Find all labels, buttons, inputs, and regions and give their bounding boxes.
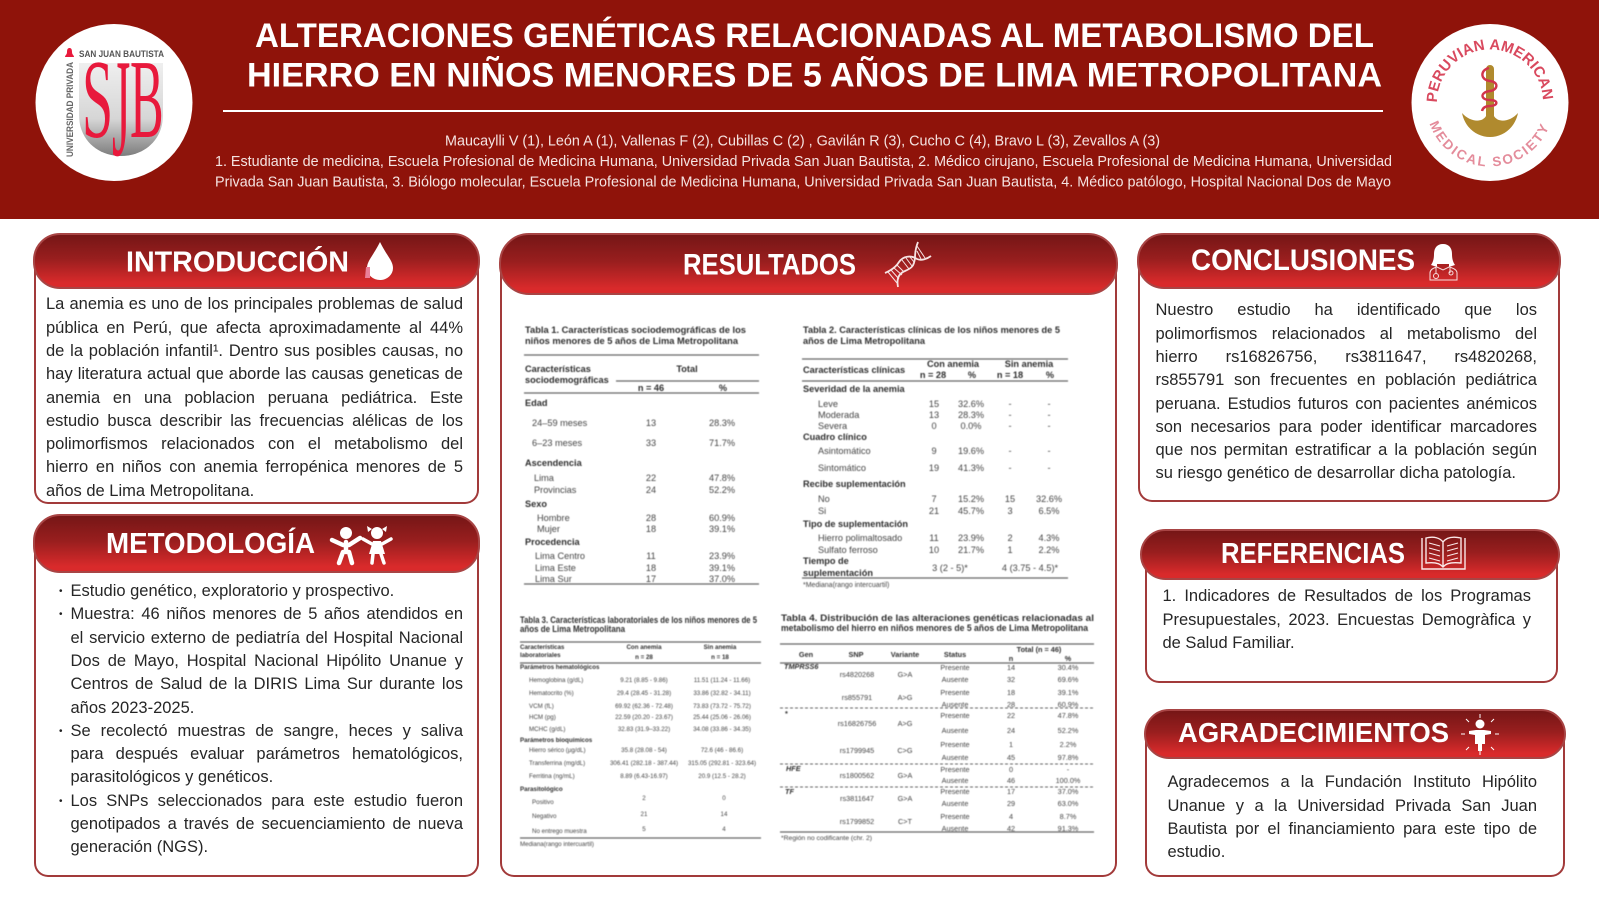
table 4: alteraciones genéticas: *: [785, 709, 788, 718]
heading: agradecimientos: AGRADECIMIENTOS: [1178, 717, 1449, 748]
heading: referencias: REFERENCIAS: [1221, 538, 1405, 570]
table 4: alteraciones genéticas: 0: [1009, 765, 1013, 774]
table 2: clínicas: 13: [929, 410, 939, 420]
table 2: clínicas: 15: [1005, 494, 1015, 504]
table 3: laboratoriales: 11.51 (11.24 - 11.66): [694, 677, 750, 684]
logo: Universidad Privada San Juan Bautista: B: [130, 38, 164, 162]
table 1: sociodemográficas: 39.1%: [709, 524, 735, 534]
table 2: clínicas: 32.6%: [958, 399, 984, 409]
table 1: sociodemográficas: 52.2%: [709, 485, 735, 495]
table 1: sociodemográficas: 28.3%: [709, 418, 735, 428]
table 2: clínicas: Tabla 2. Características clínicas de los niños menores de 5: [803, 325, 1061, 336]
text: metodología: genotipados a través de secuenciamiento de nueva: [70, 815, 463, 833]
table 3: laboratoriales: 14: [721, 811, 728, 818]
table 4: alteraciones genéticas: 24: [1007, 726, 1015, 735]
table 4: alteraciones genéticas: 30.4%: [1058, 663, 1079, 672]
table 4: alteraciones genéticas: 60.9%: [1058, 700, 1079, 709]
table 1: sociodemográficas: Procedencia: [525, 537, 581, 547]
text: agradecimientos: [1168, 773, 1537, 861]
table 1: sociodemográficas: niños menores de 5 años de Lima Metropolitana: [525, 336, 739, 347]
table 1: sociodemográficas: Características: [525, 364, 591, 374]
logo: Universidad Privada San Juan Bautista: S: [82, 38, 113, 162]
table 3: laboratoriales: años de Lima Metropolitana: [520, 624, 626, 635]
text: metodología: para después evaluar parámetros hematológicos,: [70, 745, 463, 763]
table 1: sociodemográficas: Sexo: [525, 499, 547, 509]
table 3: laboratoriales: 0: [722, 795, 726, 802]
table 4: alteraciones genéticas: Ausente: [942, 799, 968, 808]
table 4: alteraciones genéticas: rs1799852: [840, 817, 874, 826]
table 2: clínicas: Tipo de suplementación: [803, 519, 908, 529]
table 2: clínicas: 15: [929, 399, 939, 409]
table 4: alteraciones genéticas: Ausente: [942, 753, 968, 762]
logo: Peruvian American Medical Society: MEDICAL SOCIETY: [1430, 120, 1548, 166]
text: referencias: de Salud Familiar.: [1162, 634, 1295, 652]
table 2: clínicas: 10: [929, 545, 939, 555]
table 4: alteraciones genéticas: rs3811647: [840, 794, 874, 803]
table 1: sociodemográficas: 13: [646, 418, 656, 428]
table 2: clínicas: 0.0%: [961, 421, 981, 431]
table 2: clínicas: Sintomático: [818, 463, 866, 473]
text: introducción: polimorfismos relacionados con el metabolismo del: [46, 435, 463, 453]
table 4: alteraciones genéticas: Ausente: [942, 726, 968, 735]
table 2: clínicas: -: [1047, 410, 1051, 420]
table 4: alteraciones genéticas: 17: [1007, 787, 1015, 796]
table 1: sociodemográficas: 18: [646, 524, 656, 534]
table 3: laboratoriales: 2: [642, 795, 646, 802]
table 2: clínicas: [802, 325, 1068, 589]
table 4: alteraciones genéticas: Presente: [940, 740, 970, 749]
panel: introducción: [33, 233, 480, 504]
table 2: clínicas: n = 28: [920, 370, 946, 380]
table 4: alteraciones genéticas: Ausente: [942, 700, 968, 709]
table 3: laboratoriales: 306.41 (282.18 - 387.44): [610, 760, 678, 767]
table 1: sociodemográficas: %: [719, 383, 727, 393]
title: ALTERACIONES GENÉTICAS RELACIONADAS AL METABOLISMO DEL: [255, 15, 1374, 55]
table 3: laboratoriales: Ferritina (ng/mL): [529, 773, 575, 780]
table 4: alteraciones genéticas: 39.1%: [1058, 688, 1079, 697]
table 3: laboratoriales: 34.08 (33.86 - 34.35): [693, 726, 751, 733]
table 3: laboratoriales: 73.83 (73.72 - 75.72): [693, 703, 751, 710]
table 4: alteraciones genéticas: 52.2%: [1058, 726, 1079, 735]
heading: introducción: INTRODUCCIÓN: [126, 244, 349, 278]
table 2: clínicas: 4 (3.75 - 4.5)*: [1002, 563, 1059, 573]
text: metodología: generación (NGS).: [70, 838, 208, 856]
panel: resultados: [499, 233, 1118, 877]
text: conclusiones: peruana. Estudios futuros con pacientes anémicos: [1156, 395, 1537, 413]
table 2: clínicas: Sin anemia: [1005, 359, 1054, 369]
table 3: laboratoriales: Con anemia: [626, 644, 662, 651]
logo: Peruvian American Medical Society: PERUVIAN AMERICAN: [1426, 39, 1554, 102]
table 1: sociodemográficas: n = 46: [638, 383, 664, 393]
panel: agradecimientos: [1144, 709, 1566, 877]
table 2: clínicas: 45.7%: [958, 506, 984, 516]
table 3: laboratoriales: VCM (fL): [529, 703, 554, 710]
table 4: alteraciones genéticas: A>G: [898, 693, 913, 702]
table 2: clínicas: 1: [1007, 545, 1013, 555]
panel: metodología: •: [59, 726, 63, 737]
table 2: clínicas: Recibe suplementación: [803, 479, 906, 489]
table 1: sociodemográficas: 37.0%: [709, 574, 735, 584]
table 3: laboratoriales: Características: [520, 644, 565, 651]
table 2: clínicas: Cuadro clínico: [803, 432, 867, 442]
table 4: alteraciones genéticas: 42: [1007, 824, 1015, 833]
panel: referencias: [1140, 529, 1560, 683]
table 3: laboratoriales: Positivo: [532, 799, 554, 806]
table 2: clínicas: Severidad de la anemia: [803, 384, 906, 394]
table 4: alteraciones genéticas: 8.7%: [1060, 812, 1077, 821]
table 3: laboratoriales: HCM (pg): [529, 714, 556, 721]
text: agradecimientos: Agradecemos a la Fundación Instituto Hipólito: [1168, 773, 1537, 791]
table 4: alteraciones genéticas: 2.2%: [1060, 740, 1077, 749]
table 3: laboratoriales: n = 18: [711, 654, 729, 661]
table 1: sociodemográficas: Lima: [534, 473, 555, 483]
table 3: laboratoriales: Hematocrito (%): [529, 690, 574, 697]
table 4: alteraciones genéticas: [780, 613, 1094, 842]
heading: resultados: RESULTADOS: [683, 248, 856, 282]
table 3: laboratoriales: Hemoglobina (g/dL): [529, 677, 583, 684]
header band: [0, 0, 1599, 219]
logo: Peruvian American Medical Society: [1412, 24, 1568, 181]
table 4: alteraciones genéticas: A>G: [898, 719, 913, 728]
table 4: alteraciones genéticas: G>A: [898, 794, 913, 803]
table 4: alteraciones genéticas: Presente: [940, 765, 970, 774]
table 2: clínicas: años de Lima Metropolitana: [803, 336, 926, 347]
table 1: sociodemográficas: 24: [646, 485, 656, 495]
table 4: alteraciones genéticas: n: [1009, 654, 1013, 663]
heading: metodología: METODOLOGÍA: [106, 526, 315, 560]
table 1: sociodemográficas: 22: [646, 473, 656, 483]
text: conclusiones: su riesgo genético de desarrollar dicha patología.: [1156, 464, 1516, 482]
table 2: clínicas: suplementación: [803, 568, 873, 578]
table 3: laboratoriales: 5: [642, 826, 646, 833]
table 4: alteraciones genéticas: -: [1067, 765, 1070, 774]
authors: [215, 134, 1392, 190]
table 4: alteraciones genéticas: rs4820268: [840, 670, 874, 679]
table 2: clínicas: 2: [1007, 533, 1013, 543]
table 2: clínicas: 19.6%: [958, 446, 984, 456]
tables: [519, 325, 1095, 848]
table 2: clínicas: Sulfato ferroso: [818, 545, 878, 555]
table 2: clínicas: Leve: [818, 399, 838, 409]
text: metodología: Muestra: 46 niños menores de 5 años atendidos en: [70, 605, 463, 623]
table 4: alteraciones genéticas: 69.6%: [1058, 675, 1079, 684]
table 3: laboratoriales: Mediana(rango intercuartil): [520, 841, 594, 848]
table 1: sociodemográficas: 18: [646, 563, 656, 573]
text: metodología: Estudio genético, exploratorio y prospectivo.: [70, 582, 394, 600]
table 1: sociodemográficas: Lima Sur: [535, 574, 572, 584]
text: introducción: anemia en una poblacion peruana pediátrica. Este: [46, 389, 463, 407]
table 2: clínicas: -: [1008, 463, 1012, 473]
table 3: laboratoriales: [520, 615, 761, 848]
table 1: sociodemográficas: 17: [646, 574, 656, 584]
table 4: alteraciones genéticas: rs16826756: [838, 719, 876, 728]
table 2: clínicas: 2.2%: [1039, 545, 1059, 555]
text: conclusiones: que nos permitan estratificar a la población según: [1156, 441, 1537, 459]
text: metodología: [59, 582, 464, 856]
table 2: clínicas: 19: [929, 463, 939, 473]
text: introducción: hierro en niños con anemia ferropénica menores de 5: [46, 458, 463, 476]
table 3: laboratoriales: 32.83 (31.9–33.22): [618, 726, 670, 733]
table 3: laboratoriales: 72.6 (46 - 86.6): [701, 747, 743, 754]
table 1: sociodemográficas: Total: [676, 364, 698, 374]
table 2: clínicas: -: [1047, 463, 1051, 473]
table 1: sociodemográficas: Tabla 1. Características sociodemográficas de los: [525, 325, 746, 336]
table 3: laboratoriales: Tabla 3. Características laboratoriales de los niños menores de 5: [520, 615, 758, 626]
table 4: alteraciones genéticas: Presente: [940, 711, 970, 720]
table 4: alteraciones genéticas: 45: [1007, 753, 1015, 762]
table 4: alteraciones genéticas: 18: [1007, 688, 1015, 697]
table 2: clínicas: 0: [931, 421, 937, 431]
text: metodología: el servicio externo de pediatría del Hospital Nacional: [70, 629, 463, 647]
logo: Universidad Privada San Juan Bautista: UNIVERSIDAD PRIVADA: [65, 62, 76, 157]
table 4: alteraciones genéticas: SNP: [848, 650, 864, 659]
table 1: sociodemográficas: sociodemográficas: [525, 375, 609, 385]
table 1: sociodemográficas: 47.8%: [709, 473, 735, 483]
text: introducción: años de Lima Metropolitana.: [46, 482, 254, 500]
table 3: laboratoriales: MCHC (g/dL): [529, 726, 565, 733]
logo: Universidad Privada San Juan Bautista: [36, 24, 192, 186]
table 2: clínicas: 7: [931, 494, 937, 504]
title: HIERRO EN NIÑOS MENORES DE 5 AÑOS DE LIMA METROPOLITANA: [247, 56, 1382, 94]
table 4: alteraciones genéticas: metabolismo del hierro en niños menores de 5 años de Lima Metropolitana: [781, 623, 1089, 634]
table 2: clínicas: %: [968, 370, 976, 380]
table 2: clínicas: 41.3%: [958, 463, 984, 473]
table 3: laboratoriales: 35.8 (28.08 - 54): [621, 747, 667, 754]
authors: Maucaylli V (1), León A (1), Vallenas F (2), Cubillas C (2) , Gavilán R (3), Cucho C (4), Bravo L (3), Zevallos A (3): [445, 134, 1160, 150]
table 2: clínicas: 28.3%: [958, 410, 984, 420]
table 3: laboratoriales: Parasitológico: [520, 786, 563, 793]
table 1: sociodemográficas: 28: [646, 513, 656, 523]
heading: resultados: [683, 242, 932, 288]
table 4: alteraciones genéticas: 28: [1007, 700, 1015, 709]
table 4: alteraciones genéticas: 37.0%: [1058, 787, 1079, 796]
table 1: sociodemográficas: Hombre: [537, 513, 570, 523]
text: conclusiones: Nuestro estudio ha identificado que los: [1156, 301, 1537, 319]
table 3: laboratoriales: 21: [641, 811, 648, 818]
table 1: sociodemográficas: 33: [646, 438, 656, 448]
text: referencias: [1162, 587, 1531, 652]
table 3: laboratoriales: 9.21 (8.85 - 9.86): [620, 677, 668, 684]
table 2: clínicas: Con anemia: [927, 359, 980, 369]
table 1: sociodemográficas: [524, 325, 759, 584]
table 3: laboratoriales: No entrego muestra: [532, 828, 587, 835]
table 4: alteraciones genéticas: HFE: [786, 764, 802, 773]
table 2: clínicas: 3: [1007, 506, 1013, 516]
table 2: clínicas: *Mediana(rango intercuartil): [803, 582, 889, 589]
table 2: clínicas: 6.5%: [1039, 506, 1059, 516]
table 4: alteraciones genéticas: Ausente: [942, 675, 968, 684]
table 4: alteraciones genéticas: *Región no codificante (chr. 2): [781, 835, 872, 842]
text: metodología: Dos de Mayo, Hospital Nacional Hipólito Unanue y: [70, 652, 463, 670]
table 1: sociodemográficas: 60.9%: [709, 513, 735, 523]
text: introducción: de la población infantil¹. Dentro sus posibles causas, no: [46, 342, 463, 360]
table 4: alteraciones genéticas: rs1799945: [840, 746, 874, 755]
table 4: alteraciones genéticas: 32: [1007, 675, 1015, 684]
table 2: clínicas: Severa: [818, 421, 848, 431]
text: referencias: Presupuestales, 2023. Encuestas Demogràfica y: [1162, 611, 1531, 629]
table 3: laboratoriales: 29.4 (28.45 - 31.28): [617, 690, 671, 697]
table 4: alteraciones genéticas: 29: [1007, 799, 1015, 808]
table 2: clínicas: 4.3%: [1039, 533, 1059, 543]
authors: Privada San Juan Bautista, 3. Biólogo molecular, Escuela Profesional de Medicina Humana, Universidad Privada San Juan Bautista, 4. Médico patólogo, Hospital Nacional Dos de Mayo: [215, 174, 1391, 190]
table 4: alteraciones genéticas: 46: [1007, 776, 1015, 785]
text: introducción: hay literatura actual que aborde las causas geneticas de: [46, 365, 463, 383]
table 3: laboratoriales: 33.86 (32.82 - 34.11): [693, 690, 751, 697]
table 1: sociodemográficas: 71.7%: [709, 438, 735, 448]
table 3: laboratoriales: 8.89 (6.43-16.97): [620, 773, 668, 780]
text: agradecimientos: Unanue y a la Universidad Privada San Juan: [1168, 797, 1537, 815]
table 2: clínicas: 11: [929, 533, 939, 543]
table 2: clínicas: Características clínicas: [803, 365, 905, 375]
table 2: clínicas: -: [1008, 446, 1012, 456]
table 2: clínicas: Hierro polimaltosado: [818, 533, 902, 543]
table 2: clínicas: -: [1008, 421, 1012, 431]
table 4: alteraciones genéticas: G>A: [898, 771, 913, 780]
text: conclusiones: polimorfismos relacionados al metabolismo del: [1156, 325, 1537, 343]
text: metodología: Se recolectó muestras de sangre, heces y saliva: [70, 722, 463, 740]
panel: metodología: [33, 514, 480, 877]
table 2: clínicas: 9: [931, 446, 937, 456]
table 2: clínicas: No: [818, 494, 830, 504]
text: metodología: Centros de Salud de la DIRIS Lima Sur durante los: [70, 675, 463, 693]
table 3: laboratoriales: Parámetros bioquímicos: [520, 737, 593, 744]
table 2: clínicas: Moderada: [818, 410, 860, 420]
text: introducción: pública en Perú, que afecta aproximadamente al 44%: [46, 319, 463, 337]
table 4: alteraciones genéticas: Presente: [940, 688, 970, 697]
table 3: laboratoriales: 69.92 (62.36 - 72.48): [615, 703, 673, 710]
table 1: sociodemográficas: Lima Este: [535, 563, 576, 573]
table 4: alteraciones genéticas: Presente: [940, 787, 970, 796]
table 4: alteraciones genéticas: G>A: [898, 670, 913, 679]
table 2: clínicas: 15.2%: [958, 494, 984, 504]
table 2: clínicas: -: [1047, 446, 1051, 456]
authors: 1. Estudiante de medicina, Escuela Profesional de Medicina Humana, Universidad Privada San Juan Bautista, 2. Médico cirujano, Escuela Profesional de Medicina Humana, Universidad: [215, 154, 1392, 170]
table 2: clínicas: 23.9%: [958, 533, 984, 543]
table 4: alteraciones genéticas: Status: [944, 650, 966, 659]
table 4: alteraciones genéticas: C>G: [897, 746, 913, 755]
table 2: clínicas: -: [1047, 421, 1051, 431]
text: referencias: 1. Indicadores de Resultados de los Programas: [1162, 587, 1531, 605]
text: introducción: estudio busca describir las frecuencias alélicas de los: [46, 412, 463, 430]
table 1: sociodemográficas: Ascendencia: [525, 458, 583, 468]
table 3: laboratoriales: 4: [722, 826, 726, 833]
text: conclusiones: rs855791 son frecuentes en población pediátrica: [1156, 371, 1537, 389]
table 4: alteraciones genéticas: TMPRSS6: [784, 662, 819, 671]
table 3: laboratoriales: Parámetros hematológicos: [520, 664, 600, 671]
panel: metodología: •: [59, 586, 63, 597]
panel: metodología: •: [59, 796, 63, 807]
heading: metodología: [106, 526, 393, 566]
table 1: sociodemográficas: 23.9%: [709, 551, 735, 561]
text: metodología: años 2023-2025.: [70, 699, 194, 717]
table 2: clínicas: Si: [818, 506, 826, 516]
table 2: clínicas: Tiempo de: [803, 556, 849, 566]
text: conclusiones: hierro rs16826756, rs3811647, rs4820268,: [1156, 348, 1537, 366]
table 2: clínicas: 21: [929, 506, 939, 516]
table 4: alteraciones genéticas: 91.3%: [1058, 824, 1079, 833]
table 3: laboratoriales: Transferrina (mg/dL): [529, 760, 585, 767]
table 4: alteraciones genéticas: Ausente: [942, 824, 968, 833]
table 2: clínicas: 21.7%: [958, 545, 984, 555]
table 4: alteraciones genéticas: Variante: [891, 650, 919, 659]
table 1: sociodemográficas: Mujer: [537, 524, 560, 534]
table 4: alteraciones genéticas: Gen: [799, 650, 813, 659]
table 2: clínicas: 3 (2 - 5)*: [932, 563, 968, 573]
panel: metodología: •: [59, 609, 63, 620]
text: metodología: parasitológicos y genéticos.: [70, 768, 273, 786]
text: introducción: La anemia es uno de los principales problemas de salud: [46, 295, 463, 313]
table 3: laboratoriales: laboratoriales: [520, 652, 561, 659]
title: [247, 15, 1382, 94]
table 1: sociodemográficas: Edad: [525, 398, 547, 408]
panel: conclusiones: [1137, 233, 1561, 502]
table 3: laboratoriales: 315.05 (292.81 - 323.64): [688, 760, 756, 767]
table 4: alteraciones genéticas: 100.0%: [1056, 776, 1081, 785]
logo: Universidad Privada San Juan Bautista: J: [112, 30, 130, 186]
table 4: alteraciones genéticas: 47.8%: [1058, 711, 1079, 720]
table 4: alteraciones genéticas: 14: [1007, 663, 1015, 672]
table 4: alteraciones genéticas: C>T: [898, 817, 913, 826]
logo: Universidad Privada San Juan Bautista: SAN JUAN BAUTISTA: [79, 49, 164, 60]
heading: conclusiones: CONCLUSIONES: [1191, 244, 1415, 277]
table 3: laboratoriales: 22.59 (20.20 - 23.67): [615, 714, 673, 721]
table 1: sociodemográficas: 6–23 meses: [532, 438, 582, 448]
table 2: clínicas: n = 18: [997, 370, 1023, 380]
text: introducción: [46, 295, 463, 500]
table 3: laboratoriales: 20.9 (12.5 - 28.2): [698, 773, 746, 780]
table 4: alteraciones genéticas: %: [1065, 654, 1072, 663]
table 2: clínicas: -: [1047, 399, 1051, 409]
table 4: alteraciones genéticas: rs855791: [842, 693, 872, 702]
table 1: sociodemográficas: 39.1%: [709, 563, 735, 573]
table 2: clínicas: %: [1046, 370, 1054, 380]
table 4: alteraciones genéticas: Ausente: [942, 776, 968, 785]
table 4: alteraciones genéticas: 63.0%: [1058, 799, 1079, 808]
table 3: laboratoriales: Sin anemia: [704, 644, 737, 651]
table 4: alteraciones genéticas: TF: [785, 787, 794, 796]
table 4: alteraciones genéticas: Total (n = 46): [1017, 645, 1062, 654]
table 4: alteraciones genéticas: 1: [1009, 740, 1013, 749]
text: conclusiones: son necesarios para poder identificar marcadores: [1156, 418, 1537, 436]
table 1: sociodemográficas: 24–59 meses: [532, 418, 588, 428]
table 1: sociodemográficas: Lima Centro: [535, 551, 585, 561]
text: conclusiones: [1156, 301, 1537, 482]
table 3: laboratoriales: n = 28: [635, 654, 653, 661]
heading: agradecimientos: [1178, 714, 1499, 755]
table 4: alteraciones genéticas: rs1800562: [840, 771, 874, 780]
text: metodología: Los SNPs seleccionados para este estudio fueron: [70, 792, 463, 810]
table 2: clínicas: 32.6%: [1036, 494, 1062, 504]
table 3: laboratoriales: 25.44 (25.06 - 26.06): [693, 714, 751, 721]
table 4: alteraciones genéticas: Presente: [940, 812, 970, 821]
table 1: sociodemográficas: 11: [646, 551, 656, 561]
table 4: alteraciones genéticas: Tabla 4. Distribución de las alteraciones genéticas relacionadas al: [781, 613, 1094, 624]
table 4: alteraciones genéticas: 4: [1009, 812, 1013, 821]
table 3: laboratoriales: Hierro sérico (µg/dL): [529, 747, 586, 754]
table 4: alteraciones genéticas: 22: [1007, 711, 1015, 720]
table 2: clínicas: -: [1008, 399, 1012, 409]
table 4: alteraciones genéticas: Presente: [940, 663, 970, 672]
text: agradecimientos: estudio.: [1168, 843, 1225, 861]
table 4: alteraciones genéticas: 97.8%: [1058, 753, 1079, 762]
text: agradecimientos: Bautista por el financiamiento para este tipo de: [1168, 820, 1537, 838]
table 2: clínicas: Asintomático: [818, 446, 871, 456]
table 3: laboratoriales: Negativo: [532, 813, 557, 820]
table 1: sociodemográficas: Provincias: [534, 485, 577, 495]
table 2: clínicas: -: [1008, 410, 1012, 420]
